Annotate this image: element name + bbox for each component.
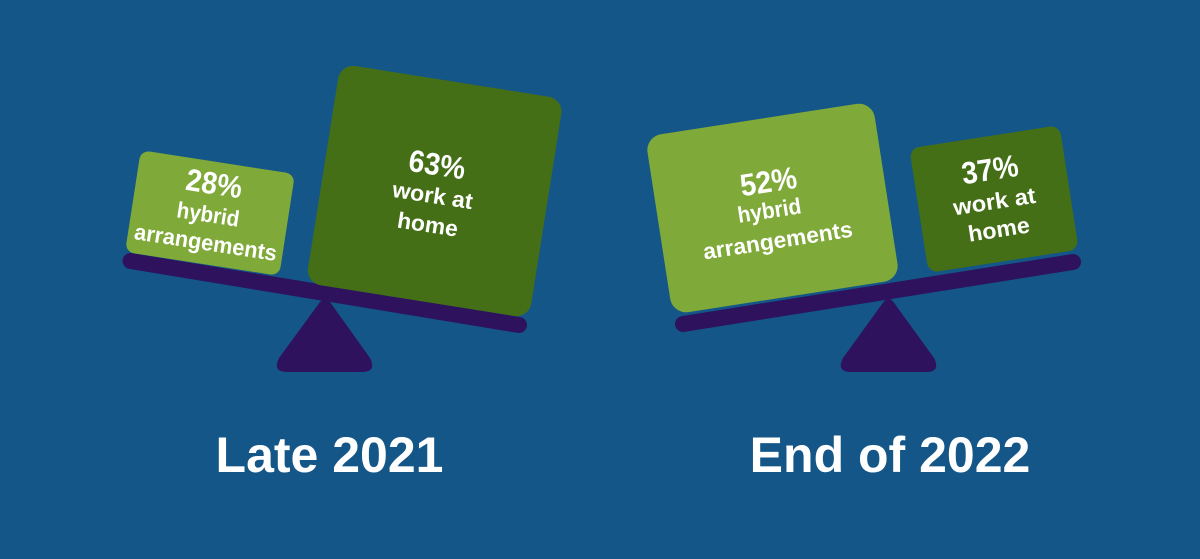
- scale beam, tilted left: [683, 262, 1073, 324]
- scale beam, tilted right: [130, 261, 519, 325]
- block: 52% hybrid arrangements: [645, 101, 900, 315]
- label: 37%: 37%: [959, 148, 1021, 191]
- label: home: home: [396, 208, 460, 242]
- label: 28%: 28%: [184, 162, 245, 205]
- scale fulcrum: [841, 299, 936, 372]
- block: 63% work at home: [306, 64, 564, 318]
- heading: Late 2021: Late 2021: [216, 427, 443, 483]
- label: work at: work at: [950, 183, 1038, 220]
- label: 52%: 52%: [738, 160, 799, 203]
- heading: End of 2022: End of 2022: [750, 427, 1030, 483]
- block: 28% hybrid arrangements: [125, 150, 295, 276]
- label: home: home: [966, 212, 1031, 247]
- label: arrangements: arrangements: [701, 217, 854, 264]
- label: work at: work at: [390, 177, 475, 214]
- label: 63%: 63%: [406, 143, 468, 186]
- panel: Late 2021 scale: [125, 64, 564, 372]
- label: hybrid: hybrid: [736, 193, 803, 228]
- label: arrangements: arrangements: [133, 219, 279, 266]
- block: 37% work at home: [909, 125, 1079, 273]
- panel: End of 2022 scale: [645, 101, 1079, 372]
- label: hybrid: hybrid: [175, 197, 241, 232]
- scale fulcrum: [277, 299, 372, 372]
